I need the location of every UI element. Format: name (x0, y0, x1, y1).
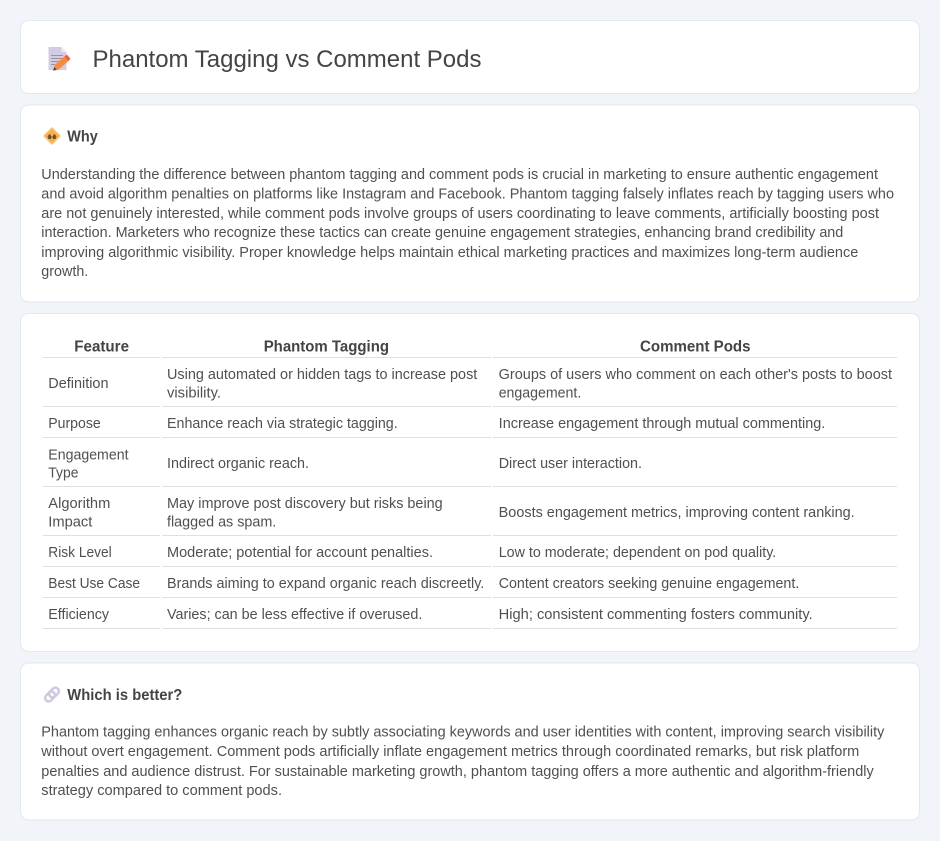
panel: which is better (20, 663, 920, 820)
table header row: Comment Pods (640, 338, 751, 356)
heading: why: Why (67, 128, 98, 146)
panel: comparison table (20, 314, 920, 652)
text block: verdict paragraph: Phantom tagging enhances organic reach by subtly associating keywords and user identities with content, improving search visibility (41, 725, 885, 741)
panel: title header (20, 20, 920, 94)
row: best use case: Content creators seeking genuine engagement. (499, 576, 799, 592)
row: engagement type: Direct user interaction. (499, 456, 642, 472)
row: definition: Groups of users who comment on each other's posts to boost (499, 367, 892, 383)
row: algorithm impact: flagged as spam. (167, 514, 276, 530)
row: efficiency: Varies; can be less effective if overused. (167, 607, 422, 623)
panel: why (20, 105, 920, 302)
row: definition: Using automated or hidden tags to increase post (167, 367, 477, 383)
text block: why paragraph: growth. (41, 264, 88, 280)
text block: verdict paragraph (40, 725, 885, 799)
text block: why paragraph: Understanding the difference between phantom tagging and comment pods is crucial in marketing to ensure authentic engagement (41, 167, 878, 183)
row: definition: visibility. (167, 385, 221, 401)
row: purpose (48, 416, 825, 432)
icon: construction diamond (44, 128, 60, 144)
text block: verdict paragraph: penalties and audience distrust. For sustainable marketing growth, phantom tagging offers a more authentic and algorithm-friendly (41, 764, 875, 780)
title: Phantom Tagging vs Comment Pods (92, 46, 482, 73)
table header row: Feature (74, 338, 129, 356)
row: definition: engagement. (499, 385, 581, 401)
row: efficiency: High; consistent commenting fosters community. (499, 607, 813, 623)
row: algorithm impact: Boosts engagement metrics, improving content ranking. (499, 505, 855, 521)
row: purpose: Increase engagement through mutual commenting. (499, 416, 825, 432)
row: definition (48, 367, 892, 401)
icon: chain link (44, 686, 60, 703)
row: efficiency (48, 607, 813, 623)
row: engagement type: Type (48, 465, 78, 481)
row: best use case: Best Use Case (48, 576, 140, 592)
row: purpose: Purpose (48, 416, 101, 432)
text block: why paragraph: and avoid algorithm penalties on platforms like Instagram and Facebook. Phantom tagging falsely inflates reach by tagging users who (41, 186, 894, 202)
table header row: Phantom Tagging (264, 338, 389, 356)
row: algorithm impact (48, 496, 855, 530)
row: algorithm impact: Impact (48, 514, 92, 530)
row: risk level: Risk Level (48, 545, 112, 561)
row: best use case: Brands aiming to expand organic reach discreetly. (167, 576, 484, 592)
text block: why paragraph (41, 167, 894, 280)
row: engagement type (48, 447, 642, 481)
text block: verdict paragraph: strategy compared to comment pods. (41, 783, 282, 799)
text block: why paragraph: interaction. Marketers who recognize these tactics can create genuine engagement strategies, enhancing brand credibility and (41, 225, 843, 241)
text block: verdict paragraph: without overt engagement. Comment pods artificially inflate engagement metrics through coordinated remarks, but risk platform (40, 744, 859, 760)
row: risk level: Low to moderate; dependent on pod quality. (499, 545, 776, 561)
row: purpose: Enhance reach via strategic tagging. (167, 416, 398, 432)
table header row (74, 338, 751, 356)
icon: memo with pencil (48, 47, 70, 71)
row: engagement type: Engagement (48, 447, 129, 463)
row: efficiency: Efficiency (48, 607, 110, 623)
text block: why paragraph: improving algorithmic visibility. Proper knowledge helps maintain ethical marketing practices and maximizes long-term audience (41, 245, 858, 261)
row: definition: Definition (48, 376, 108, 392)
row: algorithm impact: May improve post discovery but risks being (167, 496, 443, 512)
row: risk level: Moderate; potential for account penalties. (167, 545, 433, 561)
text block: why paragraph: are not genuinely interested, while comment pods involve groups of users coordinating to leave comments, artificially boosting post (41, 206, 879, 222)
row: algorithm impact: Algorithm (48, 496, 110, 512)
row: best use case (48, 576, 799, 592)
heading: which is better: Which is better? (67, 687, 182, 704)
row: engagement type: Indirect organic reach. (167, 456, 309, 472)
row: risk level (48, 545, 776, 561)
